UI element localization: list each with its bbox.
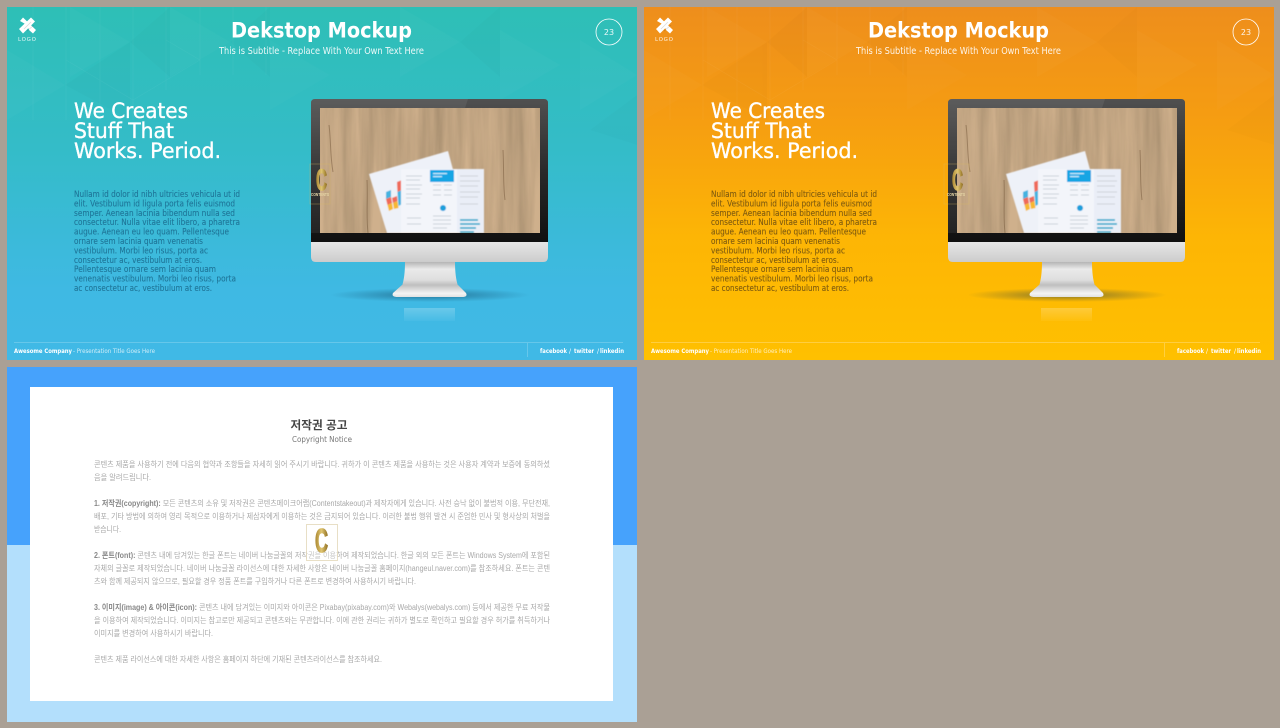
logo [655,18,674,43]
notice text [94,459,551,664]
body text: Pellentesque ornare sem lacinia quam [74,265,216,275]
notice text: 1. 저작권(copyright): 모든 콘텐츠의 소유 및 저작권은 콘텐츠메이크어랩(Contentstakeout)과 제작자에게 있습니다. 사전 승낙 없이 불법적 이용, 무단전재, [94,498,550,508]
panel: orange slide [644,7,1274,360]
notice text: 콘텐츠 제품 라이선스에 대한 자세한 사항은 홈페이지 하단에 기재된 콘텐츠라이선스를 참조하세요. [94,654,382,664]
body text: ac consectetur ac, vestibulum at eros. [711,284,849,294]
body text: ornare sem lacinia quam venenatis [711,237,840,247]
headline: We Creates [711,99,825,123]
footer: - Presentation Title Goes Here [710,348,792,355]
headline: Works. Period. [74,139,221,163]
footer: twitter [574,348,594,355]
body text: Pellentesque ornare sem lacinia quam [711,265,853,275]
headline: Stuff That [74,119,174,143]
watermark [944,164,969,204]
headline: Works. Period. [711,139,858,163]
watermark: C [315,522,328,559]
body text: augue. Aenean eu leo quam. Pellentesque [74,228,229,238]
body text: vestibulum. Morbi leo risus, porta ac [74,246,208,256]
footer: linkedin [1237,348,1261,355]
logo [18,18,37,43]
watermark: CONTENTS [311,192,329,197]
notice text: 츠와 함께 제공되지 않으므로, 필요할 경우 정품 폰트를 구입하거나 다른 폰트로 변경하여 사용하시기 바랍니다. [94,576,416,586]
footer [651,342,1261,357]
notice text: 자체의 글꼴로 제작되었습니다. 네이버 나눔글꼴 라이선스에 대한 자세한 사항은 네이버 나눔글꼴 홈페이지(hangeul.naver.com)를 참조하세요. 폰트는 콘텐 [94,563,550,573]
footer: twitter [1211,348,1231,355]
footer: - Presentation Title Goes Here [73,348,155,355]
footer: / [1234,348,1237,355]
notice text: 음을 알려드립니다. [94,472,151,482]
body text: consectetur. Nulla vitae elit libero, a pharetra [711,218,877,228]
subtitle: This is Subtitle - Replace With Your Own Text Here [218,46,424,57]
body text: ac consectetur ac, vestibulum at eros. [74,284,212,294]
notice text: 배포, 기타 방법에 의하여 영리 목적으로 이용하거나 제삼자에게 이용하는 것은 금지되어 있습니다. 이러한 불법 행위 발견 시 준엄한 민사 및 형사상의 처벌을 [94,511,550,521]
heading: 저작권 공고 [290,418,348,432]
panel: copyright notice [7,367,637,722]
headline: Stuff That [711,119,811,143]
watermark [306,522,338,560]
body text: Nullam id dolor id nibh ultricies vehicula ut id [711,190,877,200]
body text: semper. Aenean lacinia bibendum nulla sed [711,209,872,219]
footer: facebook [540,348,568,355]
body text: consectetur. Nulla vitae elit libero, a pharetra [74,218,240,228]
watermark: CONTENTS [947,192,965,197]
notice text: 을 이용하여 제작되었습니다. 이미지는 참고로만 제공되고 콘텐츠와는 무관합니다. 이에 관한 권리는 귀하가 별도로 확인하고 필요할 경우 허가를 취득하거나 [94,615,551,625]
body text: elit. Vestibulum id ligula porta felis euismod [711,199,872,209]
title: Dekstop Mockup [231,18,412,42]
body text: augue. Aenean eu leo quam. Pellentesque [711,228,866,238]
body text: venenatis vestibulum. Morbi leo risus, porta [74,275,236,285]
footer: facebook [1177,348,1205,355]
subheading: Copyright Notice [292,435,352,444]
footer: / [1206,348,1209,355]
logo: LOGO [655,37,674,43]
watermark: C [952,164,963,197]
body text: Nullam id dolor id nibh ultricies vehicula ut id [74,190,240,200]
body text: elit. Vestibulum id ligula porta felis euismod [74,199,235,209]
footer: Awesome Company [14,348,72,355]
notice text: 3. 이미지(image) & 아이콘(icon): 콘텐츠 내에 담겨있는 이미지와 아이콘은 Pixabay(pixabay.com)와 Webalys(webalys.com) 등에서 제공한 무료 저작물 [94,602,550,612]
headline [74,99,221,163]
page number badge: 23 [604,28,614,37]
body text: venenatis vestibulum. Morbi leo risus, porta [711,275,873,285]
body text: vestibulum. Morbi leo risus, porta ac [711,246,845,256]
panel: teal slide [7,7,637,360]
footer [14,342,624,357]
page number badge [1233,19,1259,45]
desktop monitor mockup [948,99,1185,321]
body text: consectetur ac, vestibulum at eros. [74,256,202,266]
footer: Awesome Company [651,348,709,355]
subtitle: This is Subtitle - Replace With Your Own Text Here [855,46,1061,57]
page number badge: 23 [1241,28,1251,37]
logo: LOGO [18,37,37,43]
headline: We Creates [74,99,188,123]
footer: / [597,348,600,355]
body text [711,190,877,294]
body text: consectetur ac, vestibulum at eros. [711,256,839,266]
notice text: 콘텐츠 제품을 사용하기 전에 다음의 협약과 조항들을 자세히 읽어 주시기 바랍니다. 귀하가 이 콘텐츠 제품을 사용하는 것은 사용자 계약과 보증에 동의하셨 [94,459,551,469]
footer: / [569,348,572,355]
body text [74,190,240,294]
notice text: 받습니다. [94,524,121,534]
watermark: C [316,164,327,197]
body text: semper. Aenean lacinia bibendum nulla sed [74,209,235,219]
notice text: 이미지를 변경하여 사용하시기 바랍니다. [94,628,213,638]
title: Dekstop Mockup [868,18,1049,42]
page number badge [596,19,622,45]
notice text: 2. 폰트(font): 콘텐츠 내에 담겨있는 한글 폰트는 네이버 나눔글꼴의 저작권을 이용하여 제작되었습니다. 한글 외의 모든 폰트는 Windows System에 포함된 [94,550,550,560]
headline [711,99,858,163]
desktop monitor mockup [311,99,548,321]
footer: linkedin [600,348,624,355]
watermark [310,164,330,204]
body text: ornare sem lacinia quam venenatis [74,237,203,247]
notice card [30,387,613,701]
